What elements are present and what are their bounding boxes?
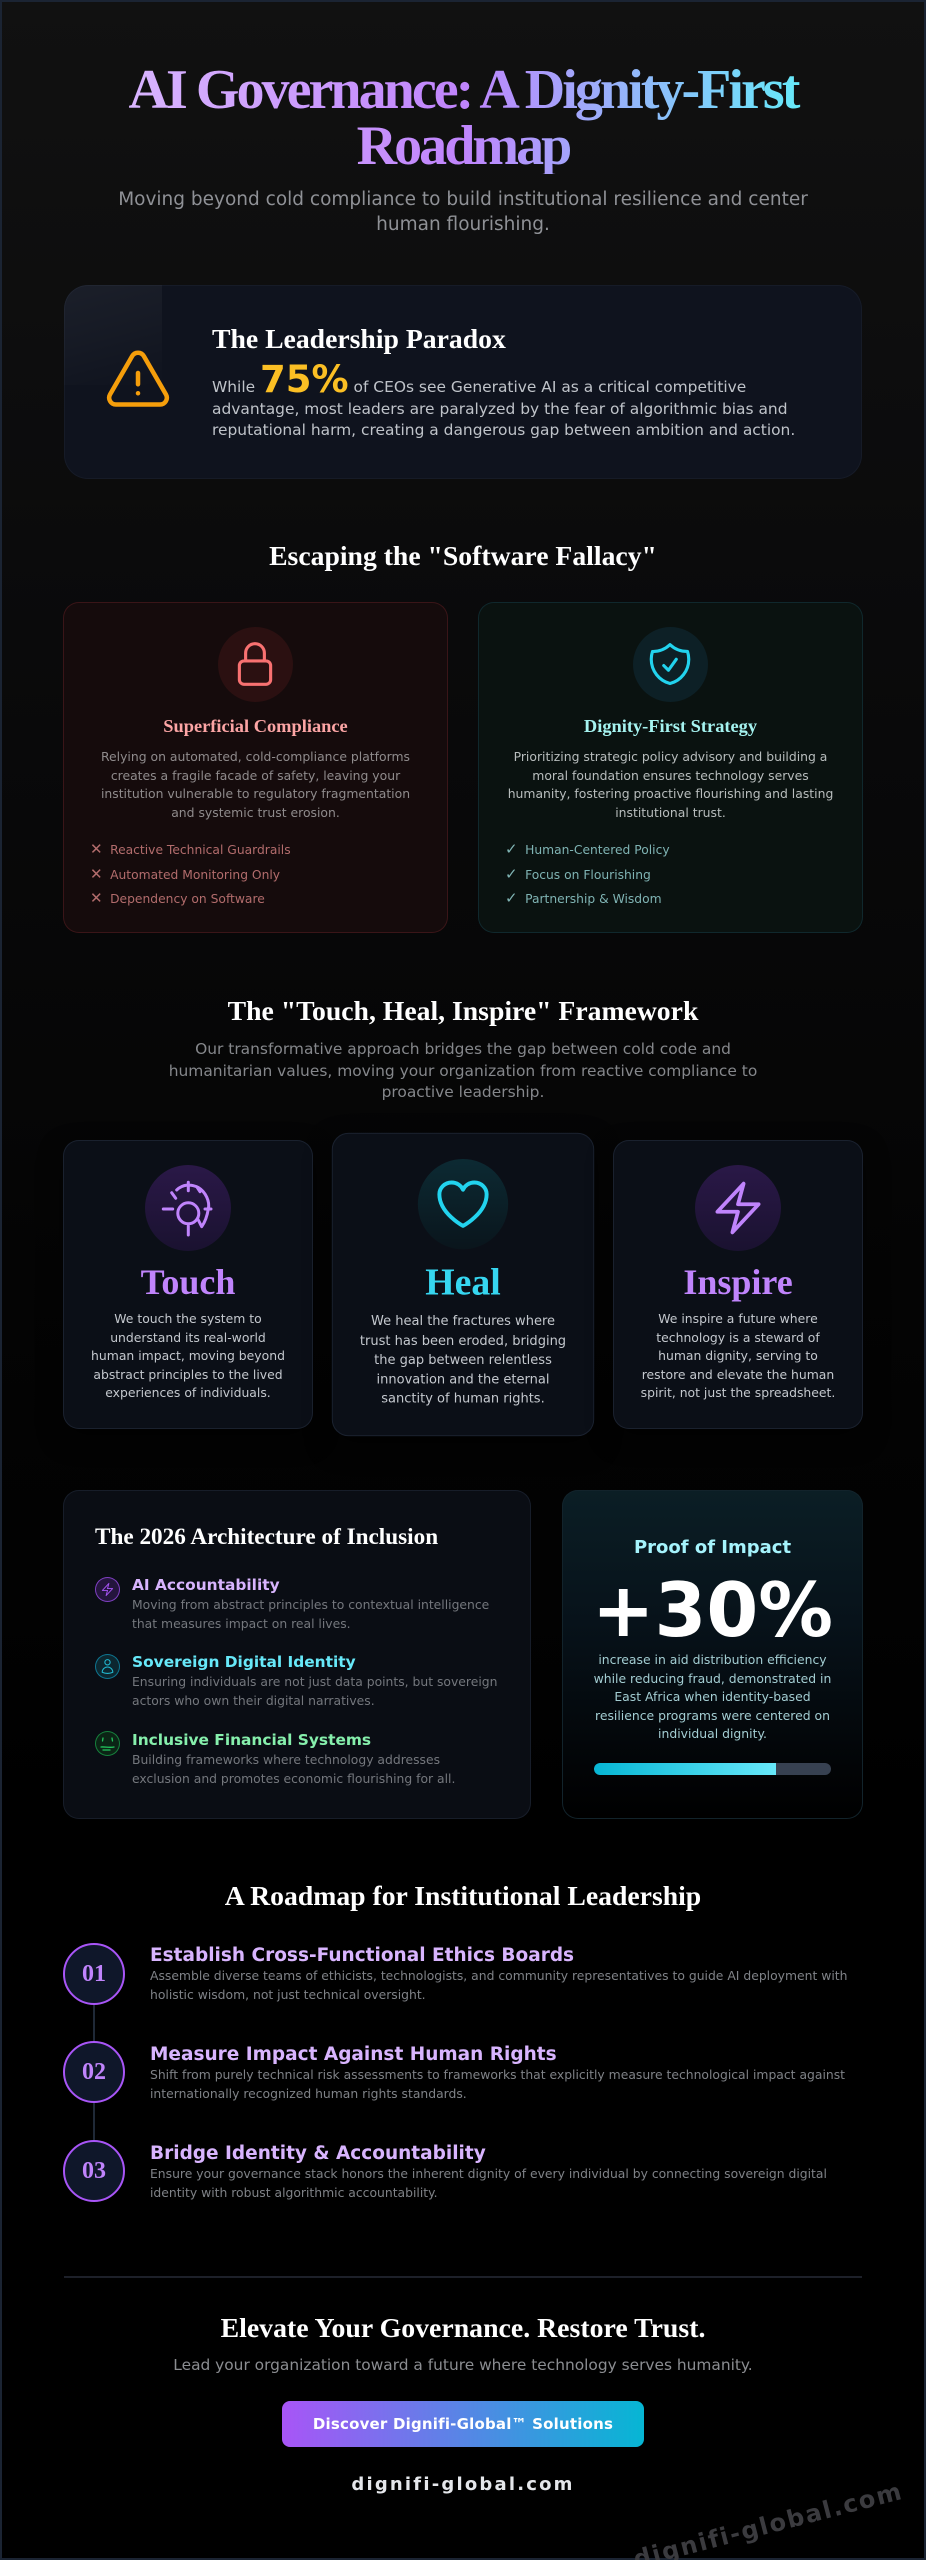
inspire description: human dignity, serving to — [658, 1348, 818, 1363]
inspire description: We inspire a future where — [658, 1311, 818, 1326]
step 01 badge: 01 — [82, 1961, 106, 1987]
footer heading: Elevate Your Governance. Restore Trust. — [221, 2313, 705, 2344]
card title: Dignity-First Strategy — [584, 716, 757, 736]
list: weaknesses: ✕ Dependency on Software — [90, 889, 265, 907]
icon: heart — [418, 1159, 508, 1249]
item title: Inclusive Financial Systems — [132, 1731, 371, 1749]
card description: creates a fragile facade of safety, leaving your — [111, 768, 400, 782]
framework intro text — [169, 1040, 757, 1101]
panel: proof of impact — [562, 1490, 863, 1819]
step 03 text: Ensure your governance stack honors the inherent dignity of every individual by connecting sovereign digital — [150, 2167, 827, 2181]
step 03 badge: 03 — [82, 2158, 106, 2184]
big stat: +30% — [592, 1567, 833, 1654]
card description — [508, 749, 833, 820]
panel: heal — [332, 1133, 594, 1436]
card description: and systemic trust erosion. — [171, 804, 340, 820]
item: ai accountability — [95, 1576, 489, 1630]
item text — [132, 1753, 455, 1786]
footer divider — [64, 2276, 862, 2278]
paradox text with 75% stat: While 75% of CEOs see Generative AI as a critical competitive — [212, 358, 746, 401]
item text: that measures impact on real lives. — [132, 1616, 351, 1630]
framework intro text: humanitarian values, moving your organization from reactive compliance to — [169, 1062, 757, 1080]
title: Roadmap — [357, 115, 569, 177]
heading: the leadership paradox: The Leadership Paradox — [212, 323, 506, 354]
inspire title: Inspire — [683, 1262, 793, 1302]
item text: Building frameworks where technology addresses — [132, 1753, 440, 1767]
paradox text with 75% stat: advantage, most leaders are paralyzed by the fear of algorithmic bias and — [212, 400, 788, 418]
item text: Moving from abstract principles to contextual intelligence — [132, 1598, 489, 1612]
heading: framework: The "Touch, Heal, Inspire" Framework — [228, 995, 698, 1026]
item text — [132, 1598, 489, 1630]
item title: AI Accountability — [132, 1576, 280, 1594]
card description: Relying on automated, cold-compliance platforms — [101, 749, 410, 764]
title — [100, 62, 826, 174]
step 02 badge: 02 — [82, 2059, 106, 2085]
proof description — [594, 1652, 831, 1741]
framework intro text: proactive leadership. — [382, 1083, 544, 1101]
panel: inspire — [613, 1140, 863, 1429]
card description: Prioritizing strategic policy advisory and building a — [514, 749, 827, 764]
subtitle — [118, 189, 808, 235]
proof heading: Proof of Impact — [634, 1537, 791, 1558]
proof description: East Africa when identity-based — [614, 1689, 811, 1704]
paradox text with 75% stat — [212, 358, 795, 439]
list: strengths: ✓ Partnership & Wisdom — [505, 889, 662, 907]
inspire description: restore and elevate the human — [642, 1366, 834, 1382]
proof description: increase in aid distribution efficiency — [598, 1652, 827, 1667]
panel: dignity-first strategy — [478, 602, 863, 933]
subtitle: Moving beyond cold compliance to build institutional resilience and center — [118, 189, 808, 210]
call to action button: Discover Dignifi-Global™ Solutions — [313, 2415, 613, 2433]
item title: Sovereign Digital Identity — [132, 1653, 356, 1671]
heal description: the gap between relentless — [374, 1351, 552, 1367]
icon: finance — [95, 1731, 120, 1756]
touch title: Touch — [141, 1262, 235, 1302]
icon: bolt — [695, 1165, 781, 1251]
list: weaknesses: ✕ Automated Monitoring Only — [90, 865, 280, 883]
step 02 badge — [63, 2041, 125, 2103]
inspire description: spirit, not just the spreadsheet. — [641, 1385, 835, 1400]
list: strengths: ✓ Focus on Flourishing — [505, 865, 651, 883]
icon: bolt small — [95, 1577, 120, 1602]
subtitle: human flourishing. — [376, 214, 550, 235]
list: weaknesses: ✕ Reactive Technical Guardrails — [90, 840, 291, 858]
heal description: sanctity of human rights. — [381, 1390, 545, 1406]
step 02 text — [150, 2068, 845, 2100]
website address: dignifi-global.com — [351, 2474, 575, 2495]
touch description: experiences of individuals. — [105, 1385, 271, 1400]
step 02 text: Shift from purely technical risk assessments to frameworks that explicitly measure technological impact against — [150, 2068, 845, 2082]
item text — [132, 1675, 497, 1708]
item text: exclusion and promotes economic flourishing for all. — [132, 1772, 455, 1786]
step 01 text: holistic wisdom, not just technical oversight. — [150, 1988, 426, 2002]
panel: touch — [63, 1140, 313, 1429]
heal title: Heal — [425, 1261, 501, 1303]
card description: moral foundation ensures technology serves — [532, 768, 809, 782]
inspire description: technology is a steward of — [656, 1330, 820, 1344]
card title: Superficial Compliance — [163, 716, 348, 736]
list: strengths: ✓ Human-Centered Policy — [505, 840, 670, 858]
touch description: abstract principles to the lived — [93, 1366, 283, 1382]
step 01 badge — [63, 1943, 125, 2005]
heading: The 2026 Architecture of Inclusion — [95, 1524, 438, 1550]
framework intro text: Our transformative approach bridges the gap between cold code and — [195, 1040, 731, 1058]
footer text: Lead your organization toward a future where technology serves humanity. — [173, 2356, 753, 2374]
icon: shield check — [633, 627, 708, 702]
title: AI Governance: A Dignity-First — [128, 59, 797, 121]
list: weaknesses — [90, 840, 291, 907]
heal description: We heal the fractures where — [371, 1312, 555, 1328]
proof description: individual dignity. — [658, 1726, 767, 1741]
step 03 badge — [63, 2140, 125, 2202]
step 01 text — [150, 1969, 847, 2002]
heading: roadmap: A Roadmap for Institutional Leadership — [225, 1880, 701, 1911]
icon: warning triangle — [106, 350, 170, 407]
card description: institution vulnerable to regulatory fragmentation — [101, 786, 410, 801]
heal description: trust has been eroded, bridging — [360, 1332, 566, 1348]
paradox text with 75% stat: reputational harm, creating a dangerous gap between ambition and action. — [212, 421, 795, 439]
item text: actors who own their digital narratives. — [132, 1694, 375, 1708]
icon: lock — [218, 627, 293, 702]
touch description: human impact, moving beyond — [91, 1348, 285, 1363]
step 03 title: Bridge Identity & Accountability — [150, 2143, 486, 2164]
panel: leadership paradox — [64, 285, 862, 479]
item: inclusive financial systems — [95, 1731, 455, 1786]
step 01 text: Assemble diverse teams of ethicists, technologists, and community representatives to guide AI deployment with — [150, 1969, 847, 1983]
touch description — [91, 1311, 285, 1400]
item: sovereign digital identity — [95, 1653, 497, 1708]
heading: escaping the software fallacy: Escaping the "Software Fallacy" — [269, 540, 657, 571]
proof description: while reducing fraud, demonstrated in — [594, 1670, 831, 1686]
step 03 text — [150, 2167, 827, 2200]
panel: architecture of inclusion — [63, 1490, 531, 1819]
proof description: resilience programs were centered on — [595, 1708, 830, 1722]
panel: superficial compliance — [63, 602, 448, 933]
inspire description — [641, 1311, 835, 1400]
step 02 text: internationally recognized human rights standards. — [150, 2086, 467, 2100]
connector line 2 — [93, 2103, 95, 2141]
step 01 title: Establish Cross-Functional Ethics Boards — [150, 1945, 574, 1966]
heal description: innovation and the eternal — [377, 1371, 549, 1386]
item text: Ensuring individuals are not just data points, but sovereign — [132, 1675, 497, 1689]
progress fill — [594, 1763, 776, 1775]
corner glow — [64, 285, 162, 385]
call to action button — [282, 2401, 644, 2447]
step 03 text: identity with robust algorithmic accountability. — [150, 2186, 438, 2200]
connector line 1 — [93, 2004, 95, 2042]
icon: touch target — [145, 1165, 231, 1251]
touch description: understand its real-world — [110, 1330, 266, 1344]
step 02 title: Measure Impact Against Human Rights — [150, 2044, 557, 2065]
progress bar — [594, 1763, 831, 1775]
card description — [101, 749, 410, 820]
heal description — [360, 1312, 566, 1406]
card description: institutional trust. — [615, 804, 726, 820]
icon: person — [95, 1654, 120, 1679]
touch description: We touch the system to — [114, 1311, 262, 1326]
list: strengths — [505, 840, 670, 907]
card description: humanity, fostering proactive flourishing and lasting — [508, 786, 833, 801]
